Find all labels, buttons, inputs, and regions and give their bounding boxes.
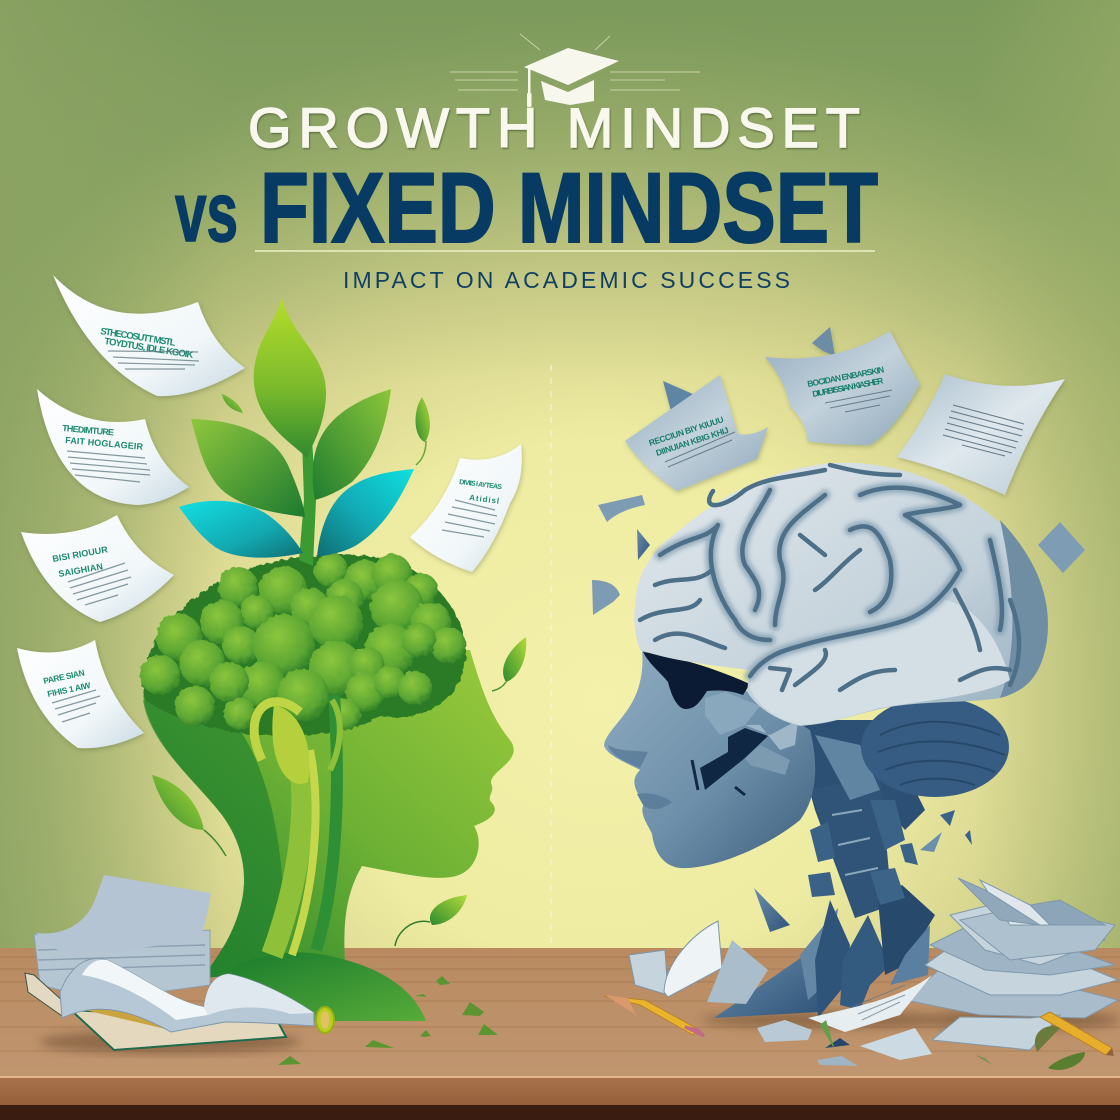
teal left leaf [179,501,303,558]
cracked paper 2: DIURBISSIAN KIASHER [811,375,884,399]
cracks [692,692,798,795]
illustration: loose sheets and small book [629,921,932,1066]
illustration: books on left [25,875,334,1050]
sprout bud [272,705,309,784]
icon: floating brain shards [592,495,1085,615]
paper 3: SAIGHIAN [58,561,104,579]
cracked paper 1: DIINUIAN KBIG KHIJ [655,425,730,458]
yellow ring [316,1007,334,1033]
top leaf [254,298,326,458]
teal right leaf [317,469,414,557]
stem [299,440,316,566]
cracked paper 1: RECCIUN BIY KIUUU [648,414,725,448]
illustration: grey brain [634,463,1048,726]
title word: vs: vs [175,165,238,259]
brain clumps [140,553,466,730]
paper 5: Atidisl [469,493,500,506]
paper 1 [53,275,245,396]
icon: scattered green scraps [820,1020,1085,1070]
illustration: cracked face [604,650,815,868]
cracked paper 1 [625,375,768,491]
paper 5: DIVIIS I AYTEAS [459,479,503,491]
temporal lobe [750,600,1010,725]
upper left leaf [191,419,305,517]
lone sheets [757,1020,812,1042]
paper 3 [21,515,174,622]
icon: floating leaves [152,394,526,946]
facial shadows [608,745,648,768]
curled sheet [36,875,211,955]
sheet with text [808,975,932,1032]
paper 1: TOYDTUS, IDLE KGOIK [104,336,194,361]
illustration: paper pile right [905,878,1118,1050]
open book [60,959,314,1032]
cracked paper 3 [897,374,1065,495]
title [175,96,878,293]
paper 4 [17,640,144,748]
closed book [71,1010,286,1050]
illustration: neck column [790,720,925,918]
small open book [629,950,668,995]
illustration: green head [143,640,514,1021]
illustration: broccoli brain [140,553,466,736]
brain folds [640,465,1019,690]
illustration: plant [179,298,414,566]
cracked paper 2 [765,331,920,445]
paper 1: STHECOSUTT MSTL [100,326,177,349]
eye socket [643,652,750,709]
paper 4: PARE SIAN [42,667,85,686]
paper 2 [37,389,189,505]
centre dashed divider [550,365,552,968]
paper 2: FAIT HOGLAGEIR [65,435,144,452]
title line: fixed mindset: FIXED MINDSET [260,152,878,263]
flying shard tops [663,381,695,415]
illustration: sprout ribbon [254,695,340,955]
face mask [604,650,815,868]
brain body [634,463,1048,726]
paper 5 [410,444,522,572]
title line: growth mindset: GROWTH MINDSET [248,96,860,159]
subtitle: IMPACT ON ACADEMIC SUCCESS [343,267,790,293]
rough brain mass [143,555,466,736]
panel: growth mindset papers [17,275,522,748]
upper right leaf [313,389,391,500]
fold shadows [660,488,1002,676]
wooden table [0,948,1120,1120]
icon: pencils [603,995,1114,1056]
hair bun [861,697,1009,797]
illustration: scattered leaf bits [278,976,498,1065]
paper 2: THEDIMTURE [62,423,114,438]
stacked pages [34,930,210,1000]
cracked paper 2: BOCIDAN ENBARSKIN [806,364,885,389]
illustration: shard pile [714,800,972,1018]
table shadows [40,1010,1120,1054]
paper 4: FIHIS 1 AIW [46,680,92,699]
base dome [210,953,426,1021]
panel: fixed mindset papers [625,327,1065,495]
paper 3: BISI RIOUUR [52,544,109,564]
icon: graduation cap [450,34,700,107]
head silhouette [143,640,514,978]
